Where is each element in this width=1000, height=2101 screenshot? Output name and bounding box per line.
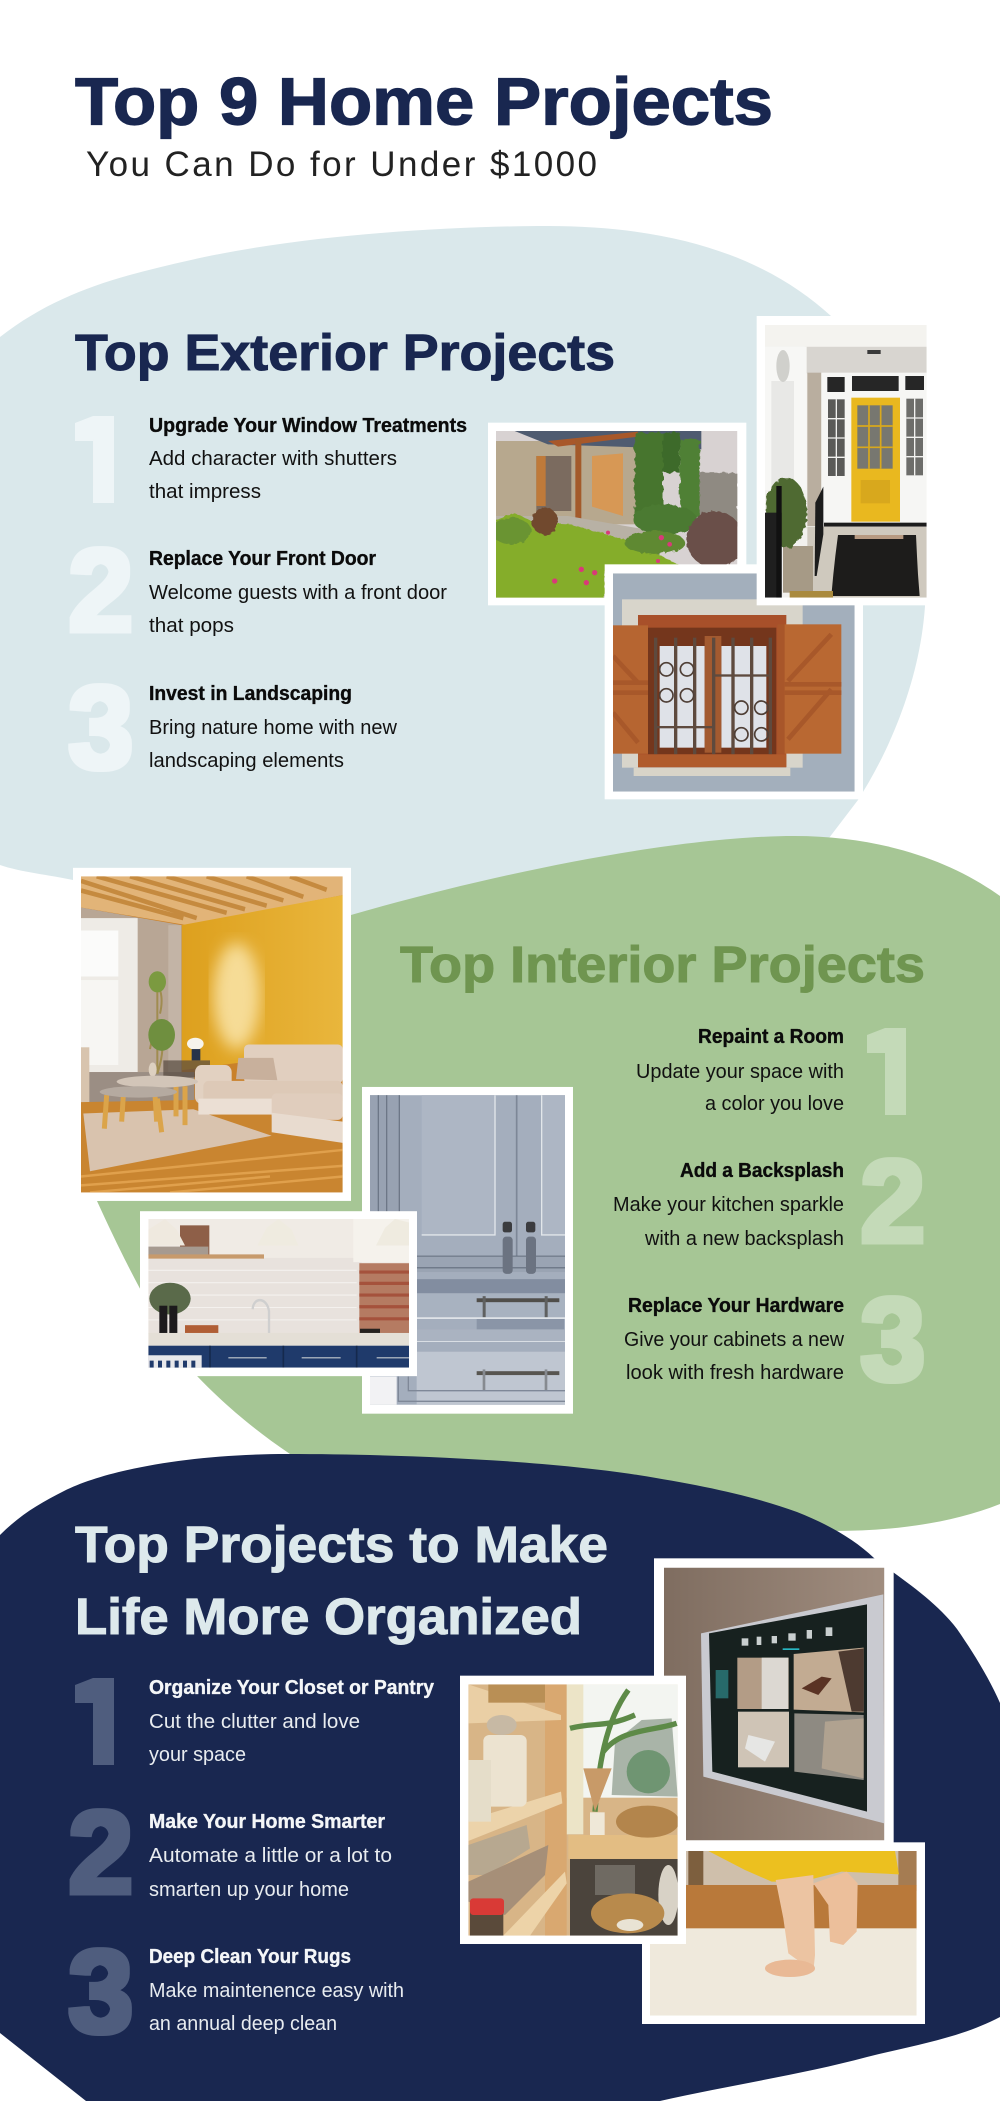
photo: child on rug <box>642 1842 925 2024</box>
photo: landscaping <box>488 423 746 605</box>
item 1: closet: your space <box>149 1744 246 1766</box>
panel: interior projects <box>73 836 1000 1531</box>
heading: organized: Life More Organized <box>75 1588 582 1645</box>
item 1: repaint: 1 <box>860 1007 926 1139</box>
item 3: hardware: look with fresh hardware <box>626 1362 844 1384</box>
photo: smart home tablet <box>654 1558 894 1848</box>
item 3: rugs: an annual deep clean <box>149 2013 337 2035</box>
item 1: window treatments: Add character with shutters <box>149 448 397 470</box>
item 1: window treatments <box>75 416 466 503</box>
item 3: hardware <box>624 1274 926 1406</box>
item 3: landscaping: Bring nature home with new <box>149 717 398 739</box>
background blob: organized <box>0 1454 1000 2101</box>
item 2: front door: that pops <box>149 615 234 637</box>
item 3: hardware: Give your cabinets a new <box>624 1329 845 1351</box>
title: Top 9 Home Projects <box>75 64 773 140</box>
item 1: repaint <box>638 1028 906 1115</box>
photo: yellow living room <box>73 868 351 1201</box>
item 2: smart home: smarten up your home <box>149 1879 349 1901</box>
background blob: exterior <box>0 226 925 930</box>
item 3: landscaping: 3 <box>68 662 134 794</box>
item 2: front door <box>68 525 447 657</box>
item 1: repaint: a color you love <box>705 1093 844 1115</box>
item 1: repaint: Repaint a Room <box>698 1026 844 1048</box>
photo: pantry shelves <box>460 1676 686 1944</box>
item 3: rugs: 3 <box>68 1926 134 2058</box>
item 3: rugs: Make maintenence easy with <box>149 1980 404 2002</box>
item 2: smart home: Automate a little or a lot to <box>149 1845 392 1867</box>
item 2: smart home: Make Your Home Smarter <box>149 1811 385 1833</box>
item 1: closet: Organize Your Closet or Pantry <box>149 1677 435 1699</box>
item 2: backsplash <box>613 1136 926 1268</box>
item 2: front door: Welcome guests with a front door <box>149 582 447 604</box>
heading: organized: Top Projects to Make <box>75 1516 608 1573</box>
heading: organized <box>75 1516 608 1645</box>
item 1: closet: 1 <box>68 1657 134 1789</box>
photo: shuttered window <box>605 564 863 799</box>
heading: exterior: Top Exterior Projects <box>75 324 615 381</box>
background blob: interior <box>97 836 1000 1531</box>
item 2: smart home <box>68 1787 392 1919</box>
item 1: window treatments: Upgrade Your Window Treatments <box>149 415 467 437</box>
item 2: backsplash: Make your kitchen sparkle <box>613 1194 844 1216</box>
photo: yellow front door <box>757 316 934 605</box>
item 2: backsplash: Add a Backsplash <box>680 1160 844 1182</box>
item 3: landscaping: landscaping elements <box>149 750 344 772</box>
item 3: rugs: Deep Clean Your Rugs <box>149 1946 351 1968</box>
photo: gray cabinets <box>362 1087 573 1414</box>
item 3: hardware: 3 <box>860 1274 926 1406</box>
item 1: window treatments: 1 <box>68 395 134 527</box>
panel: organized projects <box>0 1454 1000 2101</box>
item 2: smart home: 2 <box>68 1787 134 1919</box>
item 2: front door: Replace Your Front Door <box>149 548 376 570</box>
panel: exterior projects <box>0 226 934 930</box>
item 3: landscaping: Invest in Landscaping <box>149 683 352 705</box>
item 1: closet: Cut the clutter and love <box>149 1711 360 1733</box>
heading: interior: Top Interior Projects <box>400 936 925 993</box>
item 1: closet <box>75 1678 434 1765</box>
item 2: backsplash: with a new backsplash <box>644 1228 844 1250</box>
photo: kitchen backsplash <box>140 1211 417 1376</box>
item 1: repaint: Update your space with <box>636 1061 844 1083</box>
item 1: window treatments: that impress <box>149 481 261 503</box>
item 3: landscaping <box>68 662 398 794</box>
subtitle: You Can Do for Under $1000 <box>86 145 597 184</box>
item 3: rugs <box>68 1926 404 2058</box>
item 3: hardware: Replace Your Hardware <box>628 1295 844 1317</box>
item 2: front door: 2 <box>68 525 134 657</box>
item 2: backsplash: 2 <box>860 1136 926 1268</box>
